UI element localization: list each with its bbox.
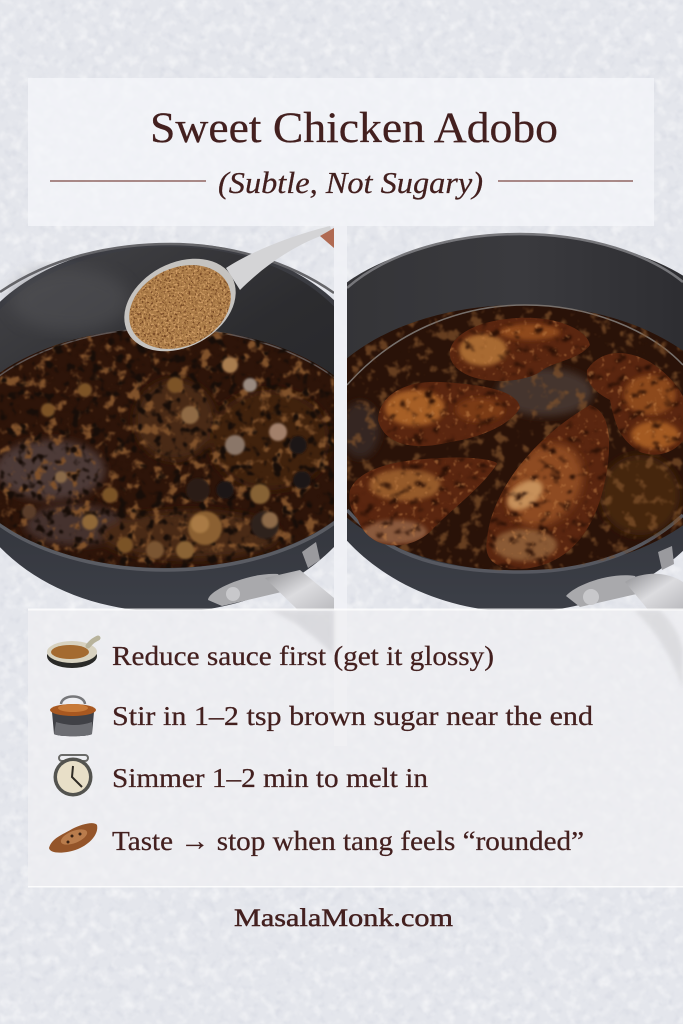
sauce left — [0, 330, 334, 568]
rim lip bottom left — [0, 521, 334, 572]
pan handle left — [208, 542, 334, 612]
steel handle seen through panel — [634, 610, 683, 690]
photo: sugar being added to reducing sauce — [0, 226, 334, 610]
photo: chicken simmering in glaze — [347, 232, 683, 610]
spoon with brown sugar — [124, 226, 334, 352]
heading: Sweet Chicken Adobo — [150, 105, 558, 152]
pan body left — [0, 244, 334, 610]
subtitle: (Subtle, Not Sugary) — [218, 165, 483, 200]
step 4 text: Taste → stop when tang feels “rounded” — [112, 825, 584, 856]
icon: skillet with sauce — [47, 638, 98, 668]
chicken pieces — [347, 310, 683, 575]
pan handle right — [566, 546, 683, 612]
icon: pot with chicken — [50, 696, 96, 736]
inner wall right — [347, 239, 683, 356]
bubbles — [22, 357, 311, 559]
step 2 text: Stir in 1–2 tsp brown sugar near the end — [112, 700, 593, 731]
pan body right — [347, 235, 683, 610]
glaze right — [347, 306, 683, 570]
step 1 text: Reduce sauce first (get it glossy) — [112, 640, 494, 671]
sauce surface left — [0, 326, 334, 570]
icon: alarm clock — [54, 755, 92, 796]
step 3 text: Simmer 1–2 min to melt in — [112, 762, 428, 793]
inner wall left — [110, 249, 334, 376]
sauce surface right — [340, 305, 683, 573]
icon: glazed chicken piece — [49, 823, 97, 853]
centre divider strip — [334, 226, 347, 746]
footer: website: MasalaMonk.com — [234, 905, 454, 932]
panel: steps — [28, 608, 683, 888]
panel: title — [28, 78, 654, 226]
